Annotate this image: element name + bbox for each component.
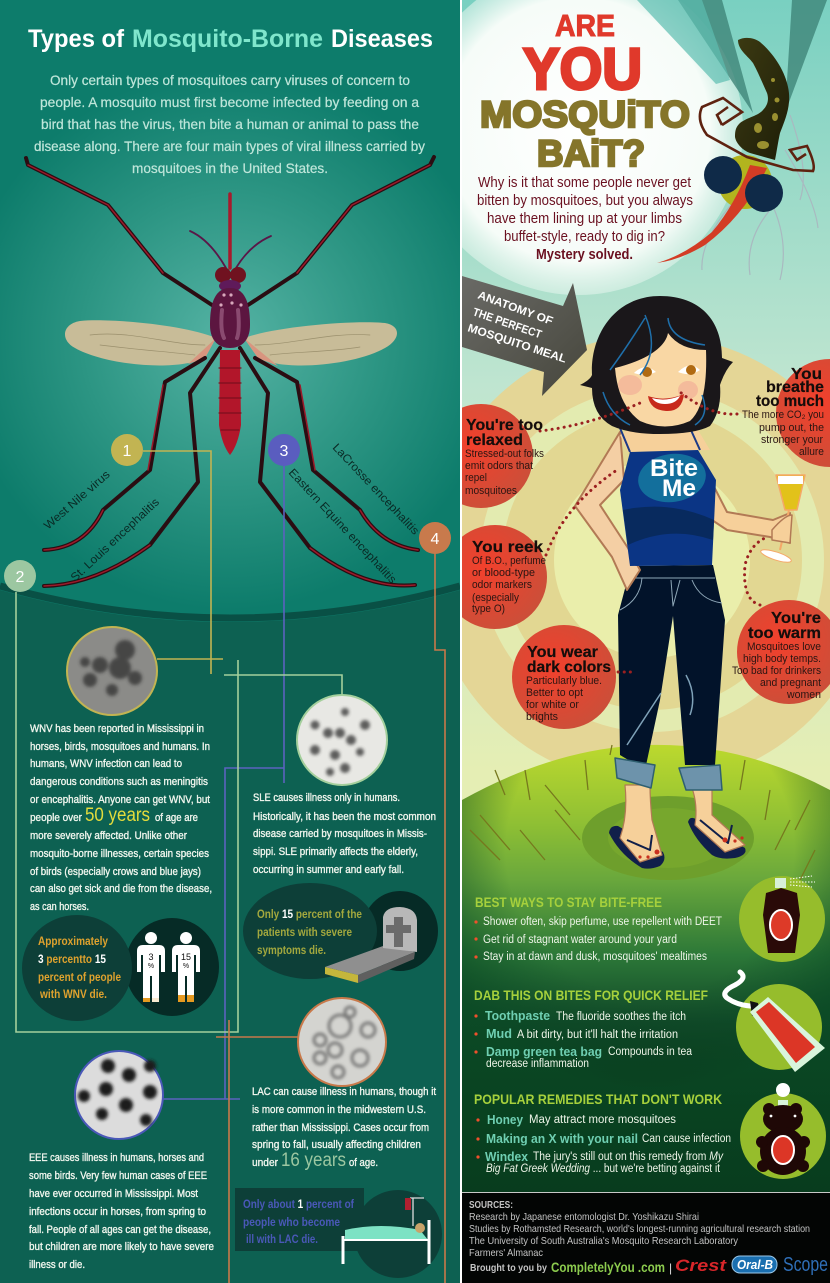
panel: dark colors: You wear: [527, 644, 598, 661]
text block: WNV: WNV has been reported in Mississippi in: [30, 723, 204, 735]
panel: dark colors: dark colors: [527, 659, 611, 676]
text block: diseases intro: mosquitoes in the United States.: [132, 160, 328, 176]
arrow: anatomy banner: [462, 276, 587, 396]
section: dab this on bites: Compounds in tea: [608, 1046, 693, 1058]
callout: SLE death rate: [243, 883, 438, 983]
text block: LAC: LAC can cause illness in humans, though it: [252, 1086, 436, 1098]
leg labels: St. Louis encephalitis: [69, 496, 162, 584]
text block: WNV: can also get sick and die from the disease,: [30, 883, 212, 895]
text block: WNV: horses, birds, mosquitoes and humans. In: [30, 741, 210, 753]
micrograph: EEE: [75, 1051, 163, 1139]
panel: sources footer: CompletelyYou .com: [551, 1259, 665, 1275]
panel: breathe too much: stronger your: [761, 434, 823, 446]
text block: intro question: Why is it that some people never get: [478, 175, 691, 191]
panel: too relaxed: You're too: [466, 417, 543, 434]
illustration: large mosquito: [26, 157, 434, 586]
panel: too warm: Mosquitoes love: [747, 641, 821, 653]
panel: sources footer: Brought to you by: [470, 1262, 547, 1274]
text block: EEE: infections occur in horses, from spring to: [29, 1206, 206, 1218]
section: dab this on bites: decrease inflammation: [486, 1058, 589, 1070]
section: best ways to stay bite-free: BEST WAYS TO STAY BITE-FREE: [475, 894, 662, 910]
panel: you reek: You reek: [472, 539, 543, 556]
panel: sources footer: [462, 1192, 830, 1283]
face: [603, 315, 706, 426]
leg labels: West Nile virus: [42, 469, 113, 532]
panel: sources footer: SOURCES:: [469, 1199, 513, 1211]
hair: [580, 296, 733, 434]
text block: LAC: spring to fall, usually affecting children: [252, 1139, 421, 1151]
section: dab this on bites: DAB THIS ON BITES FOR QUICK RELIEF: [474, 987, 708, 1003]
panel: too relaxed: emit odors that: [465, 460, 534, 472]
panel: dark colors: Particularly blue.: [526, 675, 602, 687]
text block: WNV: people over: [30, 812, 82, 824]
callout: LAC death rate: [235, 1188, 442, 1278]
section: dab this on bites: Damp green tea bag: [486, 1044, 602, 1059]
number badge 1: 1: [123, 443, 132, 460]
text block: diseases intro: Only certain types of mosquitoes carry viruses of concern to: [50, 72, 410, 88]
text block: WNV: or encephalitis. Anyone can get WNV, but: [30, 794, 210, 806]
panel: you reek: (especially: [472, 592, 519, 604]
callout: WNV death rate: [22, 915, 219, 1021]
mosquito legs: [26, 157, 434, 586]
panel: sources footer: Crest: [675, 1256, 728, 1275]
text block: SLE: disease carried by mosquitoes in Missis-: [253, 828, 427, 840]
section: popular remedies: Honey: [487, 1112, 524, 1127]
number badge 3: [268, 434, 300, 466]
number badge 3: 3: [280, 443, 289, 460]
leg labels: Eastern Equine encephalitis: [286, 467, 398, 586]
panel: left background: [0, 0, 460, 1283]
panel: too relaxed: Stressed-out folks: [465, 448, 544, 460]
text block: diseases intro: disease along. There are four main types of viral illness carried by: [34, 138, 425, 154]
text block: LAC: under: [252, 1157, 278, 1169]
text block: SLE: [253, 792, 436, 876]
mosquito wings: [65, 320, 397, 366]
icon: repellent bottle: [739, 876, 825, 962]
number badge 2: [4, 560, 36, 592]
section: dab this on bites: The fluoride soothes the itch: [556, 1011, 686, 1023]
panel: hill: [462, 745, 830, 1192]
tank top: Bite: [650, 455, 698, 482]
section: best ways to stay bite-free: Get rid of stagnant water around your yard: [483, 934, 677, 946]
text block: EEE: some birds. Very few human cases of EEE: [29, 1170, 207, 1182]
text block: WNV: of age are: [155, 812, 198, 824]
text block: diseases intro: [34, 72, 425, 176]
text block: SLE: SLE causes illness only in humans.: [253, 792, 400, 804]
leg labels: LaCrosse encephalitis: [330, 442, 421, 538]
text block: EEE: but children are more likely to have severe: [29, 1241, 214, 1253]
section: popular remedies: [474, 1091, 731, 1175]
arrow: anatomy banner: THE PERFECT: [471, 306, 543, 341]
text block: LAC: rather than Mississippi. Cases occur from: [252, 1122, 429, 1134]
text block: WNV: humans, WNV infection can lead to: [30, 758, 182, 770]
heading: diseases title: Diseases: [331, 25, 433, 53]
panel: too warm: and pregnant: [760, 677, 822, 689]
icon: human figure 15 percent: 15: [181, 952, 191, 962]
section: dab this on bites: Toothpaste: [485, 1008, 550, 1023]
section: popular remedies: POPULAR REMEDIES THAT DON'T WORK: [474, 1091, 722, 1107]
panel: too warm: You're: [771, 610, 821, 627]
heading: diseases title: [28, 25, 433, 53]
section: popular remedies: Windex: [485, 1149, 529, 1164]
leg labels: [42, 442, 421, 586]
icon: honey bear: [740, 1083, 826, 1179]
icon: human figure 3 percent: %: [148, 963, 154, 970]
text block: SLE: Historically, it has been the most common: [253, 811, 436, 823]
callout: SLE death rate: symptoms die.: [257, 945, 326, 957]
section: popular remedies: Can cause infection: [642, 1133, 731, 1145]
section: popular remedies: The jury's still out on this remedy from My: [533, 1151, 724, 1163]
text block: intro question: have them lining up at your limbs: [487, 211, 682, 227]
micrograph: LAC: [298, 998, 386, 1086]
callout: WNV death rate: percent of people: [38, 972, 121, 984]
panel: too relaxed: repel: [465, 472, 487, 484]
tank top: [620, 428, 716, 566]
text block: diseases intro: people. A mosquito must first become infected by feeding on a: [40, 94, 419, 110]
heading: diseases title: Types of: [28, 25, 125, 53]
title: are you mosquito bait: MOSQUiTO: [480, 94, 690, 135]
section: popular remedies: May attract more mosquitoes: [529, 1114, 676, 1126]
mosquito proboscis and antennae: [190, 194, 271, 268]
callout: SLE death rate: Only 15 percent of the: [257, 909, 362, 921]
panel: breathe too much: pump out, the: [759, 422, 824, 434]
section: popular remedies: Big Fat Greek Wedding ... but we're betting against it: [486, 1163, 721, 1175]
illustration: cartoon mosquito: [637, 0, 827, 280]
text block: WNV: of birds (especially crows and blue jays): [30, 866, 201, 878]
title: are you mosquito bait: [480, 8, 690, 174]
callout: WNV death rate: Approximately: [38, 936, 109, 948]
panel: too warm: Too bad for drinkers: [732, 665, 821, 677]
section: popular remedies: Making an X with your nail: [486, 1131, 638, 1146]
panel: too warm: [732, 600, 830, 704]
title: are you mosquito bait: YOU: [523, 37, 642, 102]
text block: diseases intro: bird that has the virus, then bite a human or animal to pass the: [41, 116, 419, 132]
text block: WNV: dangerous conditions such as meningitis: [30, 776, 208, 788]
panel: dark colors: Better to opt: [526, 687, 584, 699]
panel: breathe too much: You: [791, 366, 822, 383]
panel: you reek: or blood-type: [472, 567, 535, 579]
panel: right background: [462, 0, 830, 800]
callout: WNV death rate: 3 percentto 15: [38, 954, 107, 966]
text block: EEE: illness or die.: [29, 1259, 85, 1271]
panel: you reek: Of B.O., perfume: [472, 555, 546, 567]
panel: sources footer: The University of South Australia's Mosquito Research Laboratory: [469, 1235, 739, 1247]
micrograph: WNV: [67, 627, 157, 715]
left arm: [575, 432, 640, 590]
text block: intro question: [477, 175, 693, 263]
panel: you reek: type O): [472, 603, 505, 615]
callout: LAC death rate: people who become: [243, 1217, 340, 1229]
number badge 2: 2: [16, 569, 25, 586]
text block: EEE: fall. People of all ages can get the disease,: [29, 1224, 211, 1236]
icon: ointment tube: [725, 972, 825, 1072]
text block: SLE: sippi. SLE primarily affects the elderly,: [253, 846, 418, 858]
panel: dark colors: brights: [526, 711, 558, 723]
icon: gravestone: [325, 907, 417, 983]
panel: too warm: too warm: [748, 625, 821, 642]
panel: breathe too much: breathe: [766, 379, 824, 396]
text block: LAC: 16 years: [281, 1150, 346, 1171]
micrograph: SLE: [297, 695, 387, 785]
section: best ways to stay bite-free: Stay in at dawn and dusk, mosquitoes' mealtimes: [483, 951, 707, 963]
panel: too relaxed: [462, 404, 544, 508]
panel: dark colors: [512, 625, 616, 729]
heading: diseases title: Mosquito-Borne: [132, 25, 323, 53]
text block: EEE: have ever occurred in Mississippi. Most: [29, 1188, 198, 1200]
hand and wine glass: [760, 475, 805, 565]
panel: you reek: [462, 525, 547, 629]
panel: too relaxed: mosquitoes: [465, 485, 517, 497]
icon: human figure 3 percent: 3: [148, 952, 154, 962]
tank top: Me: [662, 475, 696, 502]
title: are you mosquito bait: ARE: [555, 8, 615, 43]
panel: you reek: odor markers: [472, 579, 532, 591]
icon: human figure 3 percent: [137, 932, 165, 1002]
jeans: [615, 565, 725, 790]
number badge 1: [111, 434, 143, 466]
panel: too warm: high body temps.: [743, 653, 821, 665]
icon: hospital bed: [343, 1198, 429, 1264]
panel: breathe too much: [742, 359, 830, 467]
panel: sources footer: Research by Japanese entomologist Dr. Yoshikazu Shirai: [469, 1211, 699, 1223]
panel: sources footer: Farmers' Almanac: [469, 1247, 543, 1259]
icon: human figure 15 percent: [172, 932, 200, 1002]
callout: LAC death rate: Only about 1 percent of: [243, 1199, 354, 1211]
text block: LAC: of age.: [349, 1157, 378, 1169]
mosquito abdomen: [219, 350, 241, 455]
legs and feet: [609, 785, 746, 869]
panel: breathe too much: allure: [799, 446, 824, 458]
text block: SLE: occurring in summer and early fall.: [253, 864, 404, 876]
panel: too relaxed: relaxed: [466, 432, 523, 449]
text block: LAC: is more common in the midwestern U.S.: [252, 1104, 426, 1116]
text block: intro question: Mystery solved.: [536, 247, 633, 263]
panel: too warm: women: [786, 689, 821, 701]
arrow: anatomy banner: ANATOMY OF: [476, 290, 554, 328]
text block: LAC: [252, 1086, 436, 1171]
section: dab this on bites: A bit dirty, but it'll halt the irritation: [517, 1029, 678, 1041]
witch hat: [700, 38, 814, 171]
callout: WNV death rate: with WNV die.: [39, 989, 107, 1001]
text block: intro question: bitten by mosquitoes, but you always: [477, 193, 693, 209]
dotted pointer lines: [540, 392, 765, 672]
illustration: woman: [575, 296, 805, 869]
text block: intro question: buffet-style, ready to dig in?: [504, 229, 665, 245]
panel: dark colors: for white or: [526, 699, 579, 711]
neck and chest: [620, 425, 710, 452]
icon: human figure 15 percent: %: [183, 963, 189, 970]
section: best ways to stay bite-free: [474, 894, 722, 963]
text block: WNV: as can horses.: [30, 901, 89, 913]
section: dab this on bites: Mud: [486, 1026, 512, 1041]
text block: EEE: [29, 1152, 214, 1271]
connector lines: [16, 451, 445, 1283]
mosquito head and thorax: [210, 267, 250, 348]
number badge 4: 4: [431, 531, 440, 548]
text block: WNV: [30, 723, 212, 913]
number badge 4: [419, 522, 451, 554]
section: best ways to stay bite-free: Shower often, skip perfume, use repellent with DEET: [483, 916, 722, 928]
section: dab this on bites: [474, 987, 708, 1070]
callout: LAC death rate: ill with LAC die.: [246, 1234, 318, 1246]
text block: EEE: EEE causes illness in humans, horses and: [29, 1152, 204, 1164]
text block: WNV: more severely affected. Unlike other: [30, 830, 187, 842]
panel: sources footer: |: [669, 1261, 672, 1275]
text block: WNV: 50 years: [85, 805, 150, 826]
right arm: [708, 475, 790, 543]
arrow: anatomy banner: MOSQUITO MEAL: [466, 322, 568, 366]
panel: breathe too much: too much: [756, 393, 824, 410]
panel: sources footer: Oral-B: [737, 1257, 773, 1272]
callout: SLE death rate: patients with severe: [257, 927, 352, 939]
title: are you mosquito bait: BAiT?: [537, 133, 645, 174]
text block: WNV: mosquito-borne illnesses, certain species: [30, 848, 209, 860]
